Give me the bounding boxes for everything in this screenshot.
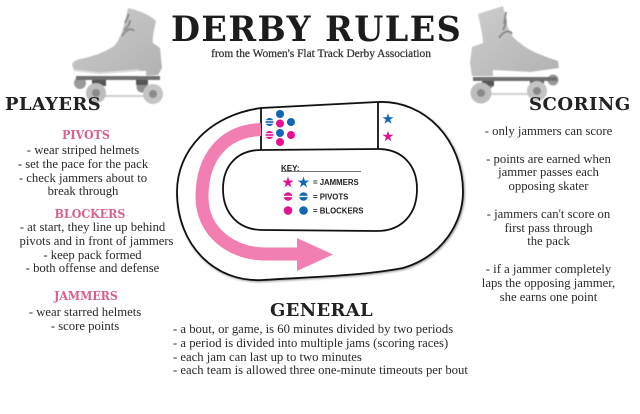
- blockers text: pivots and in front of jammers: [20, 234, 174, 248]
- scoring text: laps the opposing jammer,: [482, 276, 615, 290]
- general text: - a period is divided into multiple jams (scoring races): [173, 336, 448, 350]
- arrowhead: [297, 238, 333, 271]
- jammers text: - wear starred helmets: [29, 305, 141, 319]
- scoring text: she earns one point: [500, 290, 597, 304]
- start zone lines: [261, 102, 378, 150]
- heading: scoring: SCORING: [529, 94, 631, 115]
- subtitle: from the Women's Flat Track Derby Association: [211, 48, 431, 60]
- pivots text: [18, 143, 148, 198]
- scoring text: - only jammers can score: [485, 124, 612, 138]
- icon: left roller skate: [72, 8, 163, 104]
- general text: - each jam can last up to two minutes: [173, 350, 362, 364]
- pivots text: - check jammers about to: [19, 171, 147, 185]
- scoring text: first pass through: [504, 221, 593, 235]
- jammers text: [29, 305, 141, 333]
- pivots text: break through: [48, 184, 118, 198]
- general text: - each team is allowed three one-minute timeouts per bout: [173, 363, 468, 377]
- icon: right roller skate: [470, 6, 559, 104]
- heading: general: GENERAL: [270, 300, 373, 321]
- outer track: [177, 102, 463, 280]
- panel: jammers: JAMMERS: [54, 289, 118, 303]
- pink direction arrow: [202, 130, 298, 254]
- track: [177, 102, 463, 280]
- scoring text: - jammers can't score on: [487, 207, 610, 221]
- inner infield: [223, 149, 417, 231]
- scoring text: - if a jammer completely: [486, 262, 611, 276]
- scoring text: - points are earned when: [486, 152, 611, 166]
- pack of skaters: [265, 110, 295, 146]
- panel: pivots: PIVOTS: [62, 128, 110, 142]
- heading: players: PLAYERS: [5, 94, 101, 115]
- panel: blockers: BLOCKERS: [55, 207, 125, 221]
- pivots text: - set the pace for the pack: [18, 157, 148, 171]
- key pivots: = PIVOTS: [313, 192, 348, 202]
- blockers text: - keep pack formed: [43, 248, 142, 262]
- title: DERBY RULES: [171, 9, 462, 50]
- blockers text: - both offense and defense: [26, 261, 159, 275]
- scoring text: jammer passes each: [498, 165, 599, 179]
- scoring text: [482, 124, 615, 304]
- blockers text: - at start, they line up behind: [20, 220, 165, 234]
- jammer stars: [382, 113, 394, 141]
- key heading: KEY:: [281, 164, 300, 173]
- key: [281, 164, 363, 216]
- blockers text: [20, 220, 174, 275]
- key jammers: = JAMMERS: [313, 178, 359, 187]
- scoring text: the pack: [527, 234, 570, 248]
- jammers text: - score points: [51, 319, 119, 333]
- key blockers: = BLOCKERS: [313, 206, 363, 216]
- scoring text: opposing skater: [508, 179, 588, 193]
- pivots text: - wear striped helmets: [27, 143, 139, 157]
- general text: [173, 322, 468, 377]
- general text: - a bout, or game, is 60 minutes divided by two periods: [173, 322, 453, 336]
